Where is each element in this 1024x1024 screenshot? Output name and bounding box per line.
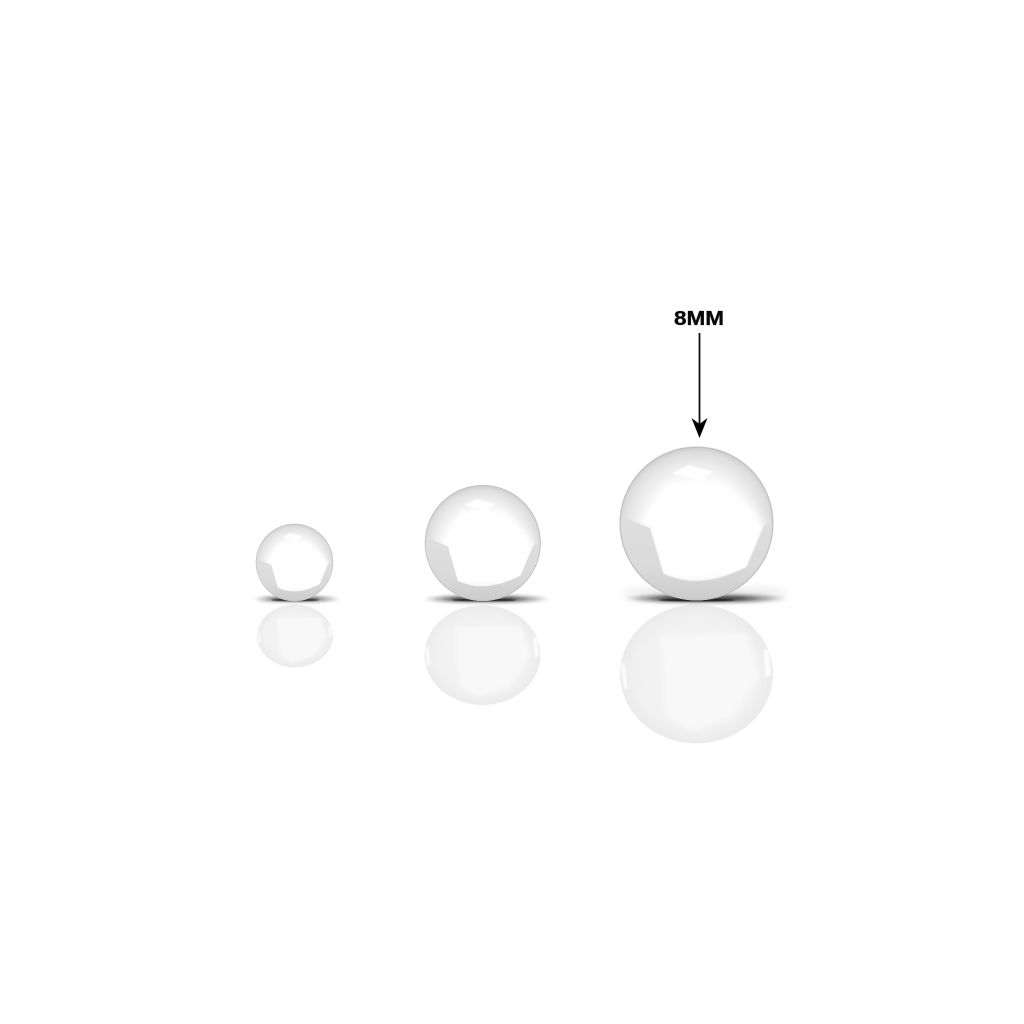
- medium sphere: [424, 485, 541, 607]
- panel: large sphere with reflection: [619, 446, 789, 744]
- shadow: small sphere: [253, 597, 341, 601]
- callout: 8MM size label with arrow: [674, 308, 724, 438]
- large sphere: [619, 446, 774, 608]
- shadow: medium sphere: [423, 596, 551, 602]
- reflection: large sphere: [620, 604, 773, 744]
- arrow: pointing to large sphere: [692, 333, 708, 438]
- shadow: large sphere: [621, 589, 789, 602]
- label: 8MM: 8MM: [674, 308, 724, 330]
- small sphere: [255, 524, 334, 605]
- reflection: medium sphere: [424, 605, 540, 705]
- panel: small sphere with reflection: [253, 524, 341, 668]
- panel: medium sphere with reflection: [423, 485, 551, 705]
- reflection: small sphere: [257, 604, 333, 668]
